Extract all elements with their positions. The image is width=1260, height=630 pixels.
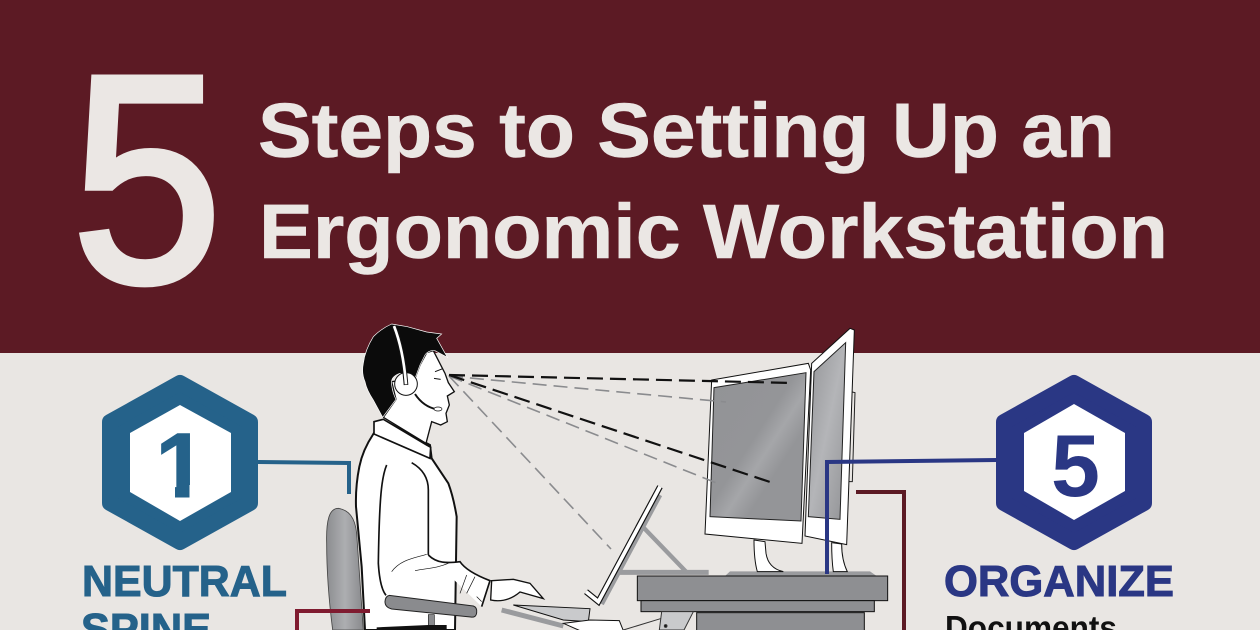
armrest xyxy=(385,595,477,617)
title xyxy=(258,88,1168,275)
tray bracket xyxy=(623,612,693,630)
desk edge xyxy=(641,601,874,612)
mouse platform xyxy=(563,620,623,630)
connector: maroon left xyxy=(297,611,370,630)
heading: neutral spine: NEUTRAL xyxy=(82,557,287,606)
hair xyxy=(363,324,447,417)
headset xyxy=(394,326,442,411)
title: Steps to Setting Up an xyxy=(258,88,1115,174)
sight lines xyxy=(449,375,793,549)
shirt collar xyxy=(374,419,431,458)
illustration: keyboard tray xyxy=(502,605,693,630)
right monitor xyxy=(805,328,854,545)
monitor foot pad xyxy=(725,571,877,576)
connector: neutral spine xyxy=(258,462,349,494)
connector: maroon right xyxy=(856,492,904,630)
heading: organize: ORGANIZE xyxy=(944,557,1174,606)
header band xyxy=(0,0,1260,353)
trousers xyxy=(377,625,447,630)
big number 5: 5 xyxy=(72,14,222,344)
badge 1: 1 xyxy=(155,415,207,517)
badge 1 xyxy=(110,383,250,542)
left monitor screen xyxy=(710,373,806,521)
chair back xyxy=(327,508,363,630)
heading: neutral spine xyxy=(81,557,287,630)
left monitor xyxy=(705,363,811,543)
monitor stands xyxy=(754,540,847,572)
arm and sleeve xyxy=(378,463,490,607)
shirt torso xyxy=(356,420,457,630)
right monitor back xyxy=(849,392,855,482)
chair post xyxy=(428,615,434,630)
tablet xyxy=(586,487,660,602)
badge 5: 5 xyxy=(1051,416,1100,515)
hand xyxy=(491,579,543,601)
illustration: seated person and chair xyxy=(327,324,543,630)
title: Ergonomic Workstation xyxy=(259,189,1168,275)
illustration: monitors, tablet and desk xyxy=(586,328,888,630)
badge 5 xyxy=(1004,383,1144,542)
desk body xyxy=(697,613,864,630)
connector: organize xyxy=(827,460,997,574)
tablet stand xyxy=(602,495,709,604)
desk top xyxy=(637,576,888,601)
right monitor screen xyxy=(808,343,846,519)
face and neck xyxy=(383,351,454,443)
keyboard xyxy=(513,605,590,622)
eye xyxy=(434,369,443,379)
tray shadow xyxy=(502,610,563,626)
